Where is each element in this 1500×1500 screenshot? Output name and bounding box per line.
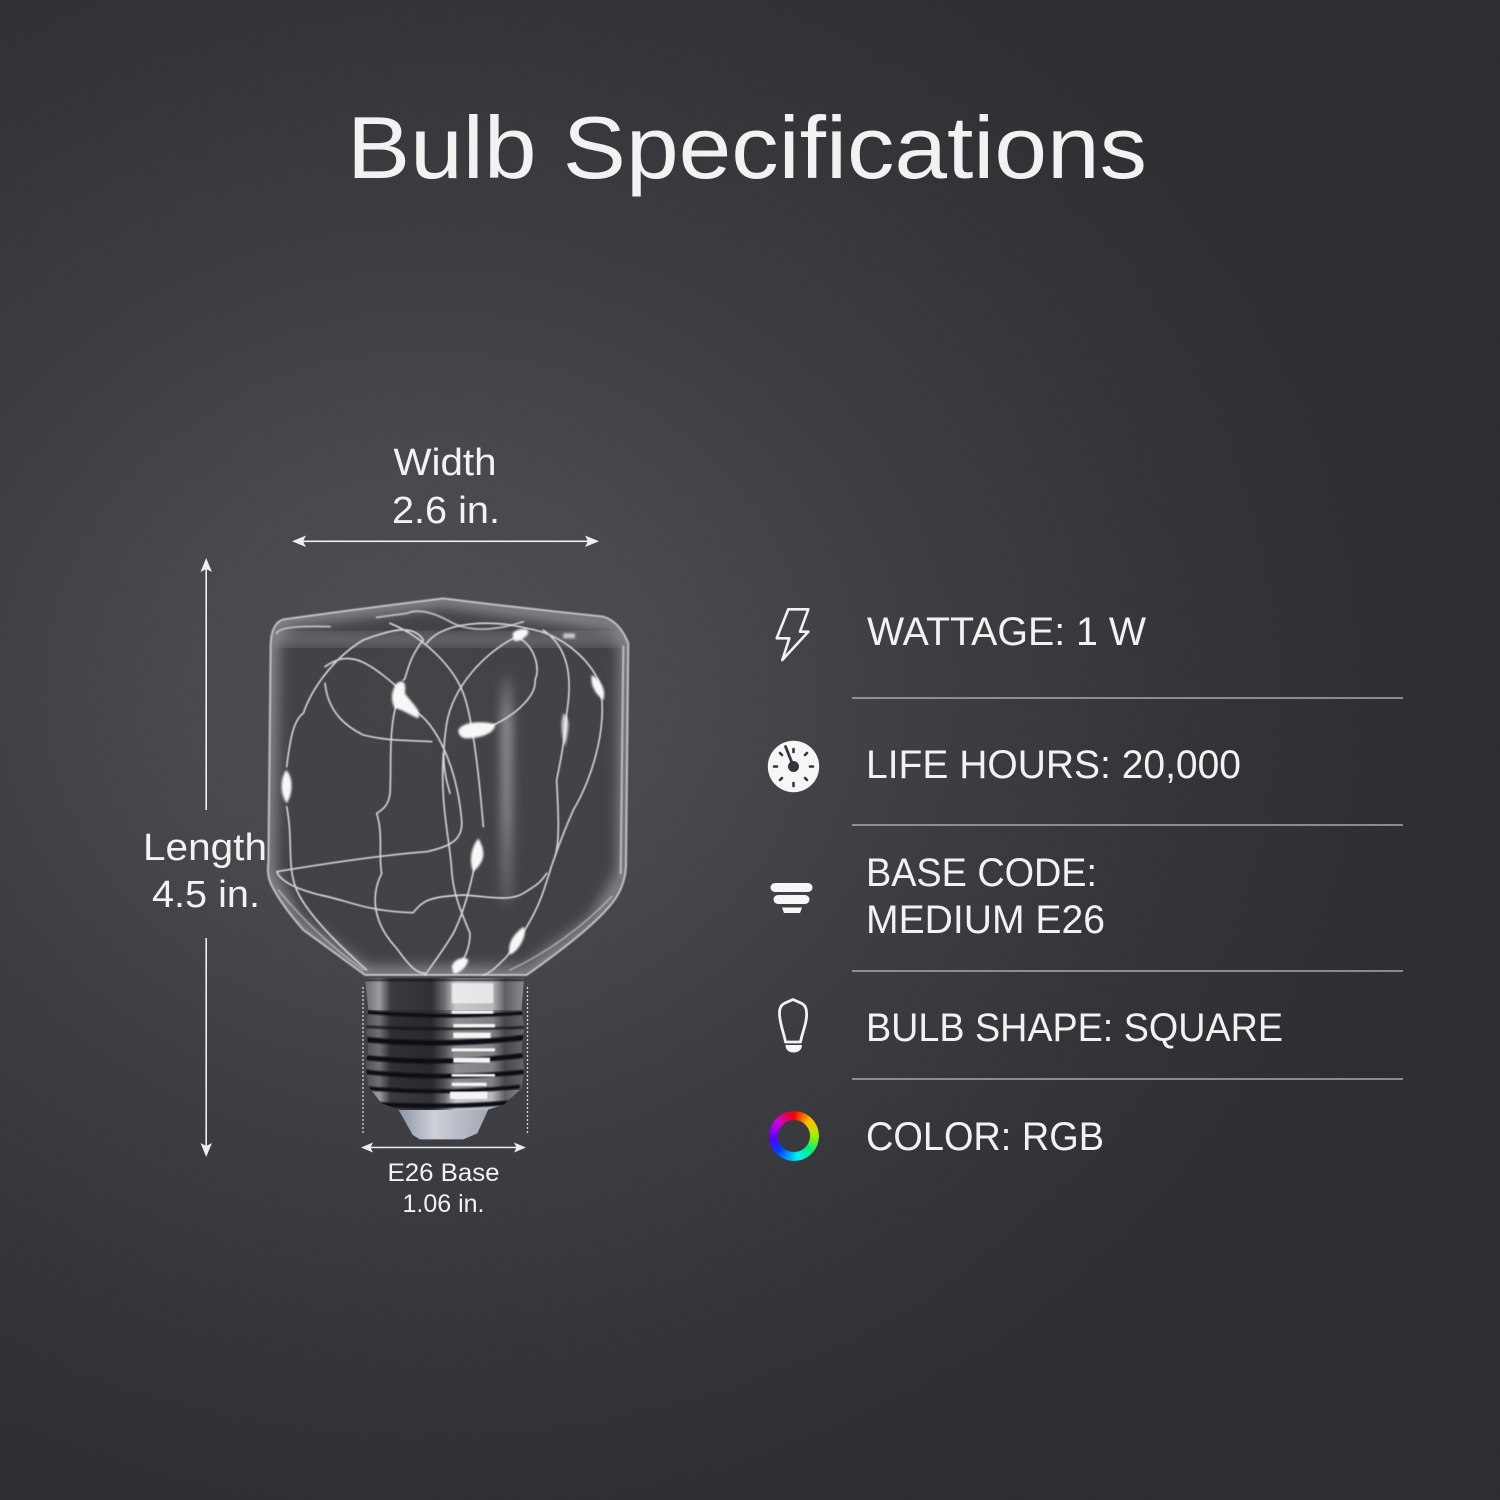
icon: clock gauge xyxy=(768,741,819,792)
length dimension xyxy=(143,558,267,1157)
bulb illustration xyxy=(267,598,628,1139)
spec row: color text: COLOR: RGB xyxy=(866,1115,1104,1159)
icon: RGB color ring xyxy=(769,1111,819,1161)
LED lights xyxy=(282,629,604,974)
bulb shape text: BULB SHAPE: SQUARE xyxy=(866,1006,1283,1050)
base dimension xyxy=(361,987,528,1218)
arrow: base width xyxy=(361,1142,526,1152)
icon: lightning bolt xyxy=(777,609,808,660)
arrow: width xyxy=(292,536,599,547)
base value: 1.06 in. xyxy=(402,1190,484,1218)
base label: E26 Base xyxy=(388,1159,500,1187)
icon: base code xyxy=(770,883,812,913)
spec row: bulb shape xyxy=(779,1000,1283,1052)
width dimension xyxy=(292,442,599,547)
title: Bulb Specifications xyxy=(347,98,1147,197)
base code value: MEDIUM E26 xyxy=(866,898,1105,942)
length label: Length xyxy=(143,827,267,869)
bulb screw base xyxy=(360,978,527,1139)
width value: 2.6 in. xyxy=(392,490,500,532)
fairy light wire xyxy=(277,623,602,975)
spec row: wattage xyxy=(777,609,1146,660)
width label: Width xyxy=(394,442,496,484)
life hours text: LIFE HOURS: 20,000 xyxy=(866,743,1241,787)
base code text: BASE CODE: xyxy=(866,851,1097,895)
bulb glass xyxy=(267,598,628,975)
dotted guides xyxy=(363,987,528,1133)
icon: bulb outline xyxy=(779,1000,807,1052)
wattage text: WATTAGE: 1 W xyxy=(867,610,1146,654)
spec row: base code xyxy=(770,851,1105,942)
arrow: length xyxy=(200,558,212,1157)
length value: 4.5 in. xyxy=(152,874,260,916)
spec row: life hours xyxy=(768,741,1241,792)
ceramic tip xyxy=(398,1109,488,1139)
